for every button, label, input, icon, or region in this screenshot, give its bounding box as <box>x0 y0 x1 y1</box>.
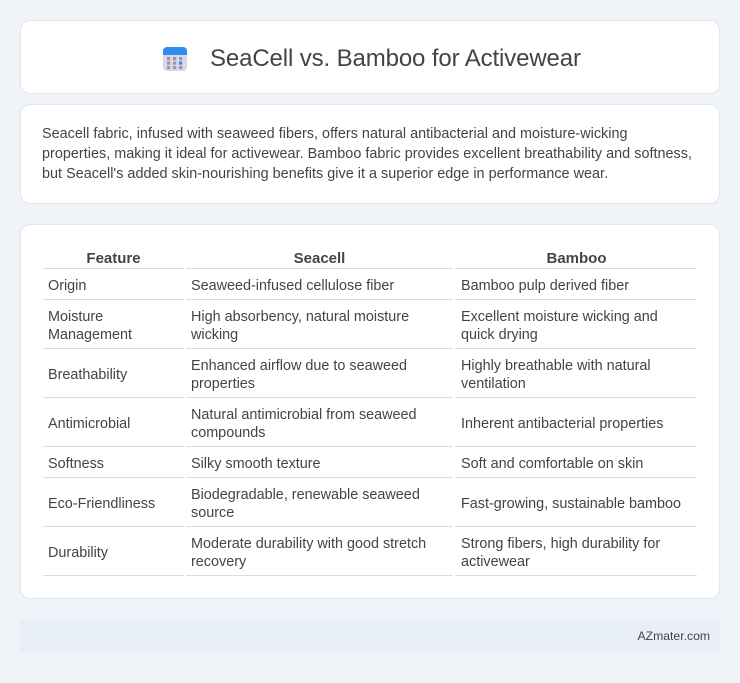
row: Moisture Management: High absorbency, natural moisture <box>191 309 409 325</box>
row: Softness: Softness <box>48 456 104 472</box>
row: Durability: Durability <box>48 545 108 561</box>
row: Breathability: Breathability <box>48 367 127 383</box>
intro text: properties, making it ideal for activewear. Bamboo fabric provides excellent breathability and softness, <box>42 146 692 162</box>
intro text: Seacell fabric, infused with seaweed fibers, offers natural antibacterial and moisture-wicking <box>42 126 628 142</box>
row: Origin: Origin <box>48 278 86 294</box>
row: Moisture Management: wicking <box>191 327 238 343</box>
row: Durability: activewear <box>461 554 530 570</box>
column header: Bamboo: Bamboo <box>546 250 606 267</box>
row: Softness <box>48 456 643 472</box>
panel: intro text card <box>20 104 720 204</box>
row: Breathability: properties <box>191 376 255 392</box>
intro text <box>42 126 692 182</box>
row: Breathability <box>48 358 651 392</box>
row: Breathability: Highly breathable with natural <box>461 358 651 374</box>
footer credit: AZmater.com <box>638 629 710 643</box>
row: Antimicrobial: Natural antimicrobial from seaweed <box>191 407 417 423</box>
row: Durability <box>48 536 660 570</box>
row: Moisture Management <box>48 309 658 343</box>
intro text: but Seacell's added skin-nourishing benefits give it a superior edge in performance wear. <box>42 166 608 182</box>
column header: Feature: Feature <box>86 250 141 267</box>
row: Softness: Soft and comfortable on skin <box>461 456 643 472</box>
icon: calendar <box>163 47 187 71</box>
row: Eco-Friendliness: Biodegradable, renewable seaweed <box>191 487 420 503</box>
panel: comparison table card <box>20 224 720 599</box>
row: Antimicrobial: Antimicrobial <box>48 416 130 432</box>
row: Eco-Friendliness: Eco-Friendliness <box>48 496 155 512</box>
row: Eco-Friendliness <box>48 487 681 521</box>
row: Moisture Management: Excellent moisture wicking and <box>461 309 658 325</box>
row: Breathability: Enhanced airflow due to seaweed <box>191 358 407 374</box>
row: Eco-Friendliness: Fast-growing, sustainable bamboo <box>461 496 681 512</box>
row: Durability: recovery <box>191 554 246 570</box>
row: Moisture Management: Moisture <box>48 309 103 325</box>
title: SeaCell vs. Bamboo for Activewear <box>210 45 581 72</box>
row: Origin <box>48 278 629 294</box>
row: Origin: Bamboo pulp derived fiber <box>461 278 629 294</box>
row: Eco-Friendliness: source <box>191 505 234 521</box>
row: Moisture Management: quick drying <box>461 327 538 343</box>
row: Antimicrobial <box>48 407 663 441</box>
row: Breathability: ventilation <box>461 376 526 392</box>
row: Softness: Silky smooth texture <box>191 456 321 472</box>
panel: title card <box>20 20 720 94</box>
row: Antimicrobial: Inherent antibacterial properties <box>461 416 663 432</box>
row: Origin: Seaweed-infused cellulose fiber <box>191 278 394 294</box>
row: Durability: Strong fibers, high durability for <box>461 536 660 552</box>
row: Moisture Management: Management <box>48 327 132 343</box>
column header: Seacell: Seacell <box>294 250 345 267</box>
footer bar <box>20 619 720 653</box>
row: Durability: Moderate durability with good stretch <box>191 536 426 552</box>
row: Antimicrobial: compounds <box>191 425 265 441</box>
